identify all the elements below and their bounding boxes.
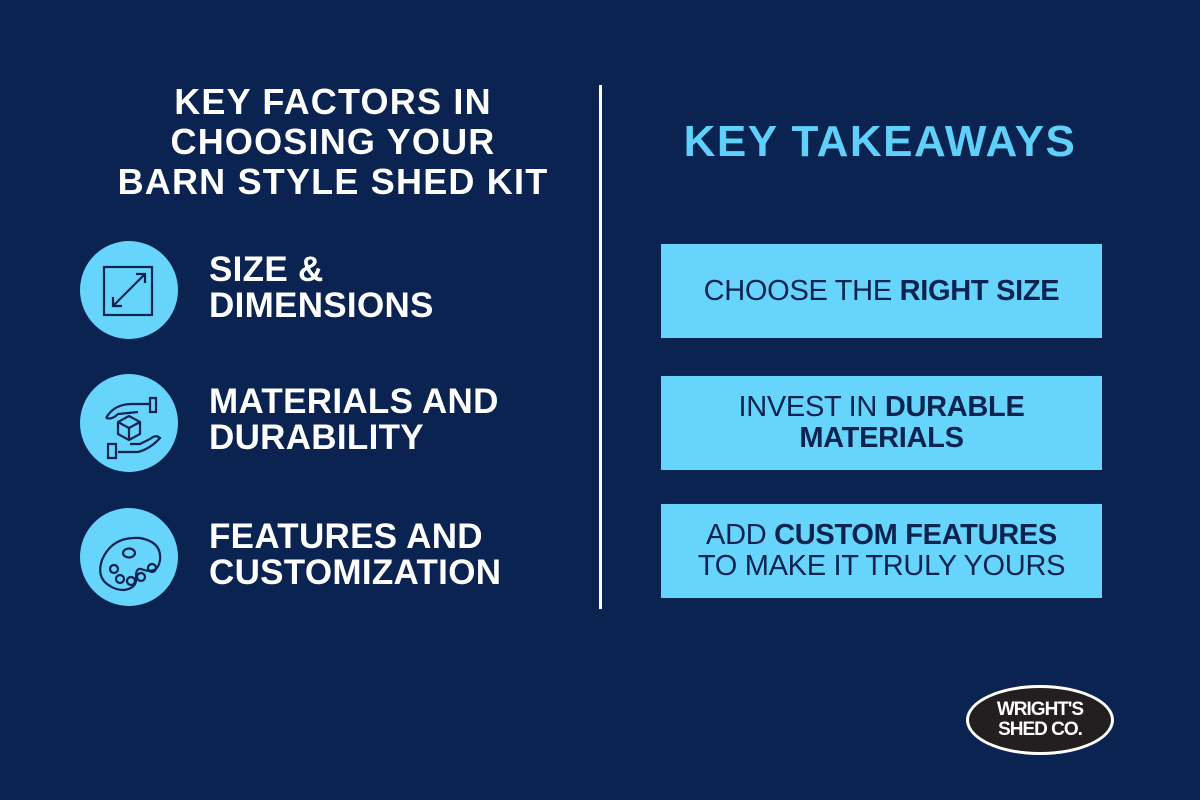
title <box>118 81 548 202</box>
title: KEY FACTORS IN <box>174 81 492 122</box>
icon: palette <box>80 508 178 606</box>
title: BARN STYLE SHED KIT <box>118 161 548 202</box>
box 2: INVEST IN DURABLE <box>738 391 1024 423</box>
box 3: TO MAKE IT TRULY YOURS <box>698 550 1065 582</box>
item: size: DIMENSIONS <box>209 286 434 325</box>
item: materials: DURABILITY <box>209 418 424 457</box>
box 1 <box>661 244 1102 338</box>
heading: key takeaways: KEY TAKEAWAYS <box>684 117 1076 166</box>
icon: size <box>80 241 178 339</box>
divider <box>599 85 602 609</box>
box 3 <box>661 504 1102 598</box>
icon: materials <box>80 374 178 472</box>
title: CHOOSING YOUR <box>170 121 495 162</box>
item: features: FEATURES AND <box>209 517 483 556</box>
box 3: ADD CUSTOM FEATURES <box>706 519 1057 551</box>
logo <box>966 685 1114 755</box>
item: materials: MATERIALS AND <box>209 382 499 421</box>
item: materials <box>209 382 499 457</box>
item: size: SIZE & <box>209 250 324 289</box>
logo: SHED CO. <box>998 719 1082 740</box>
item: features: CUSTOMIZATION <box>209 553 501 592</box>
box 2: MATERIALS <box>799 422 964 454</box>
box 2 <box>661 376 1102 470</box>
logo: WRIGHT'S <box>997 699 1083 720</box>
box 1: CHOOSE THE RIGHT SIZE <box>704 274 1059 306</box>
item: features <box>209 517 501 592</box>
item: size <box>209 250 434 325</box>
